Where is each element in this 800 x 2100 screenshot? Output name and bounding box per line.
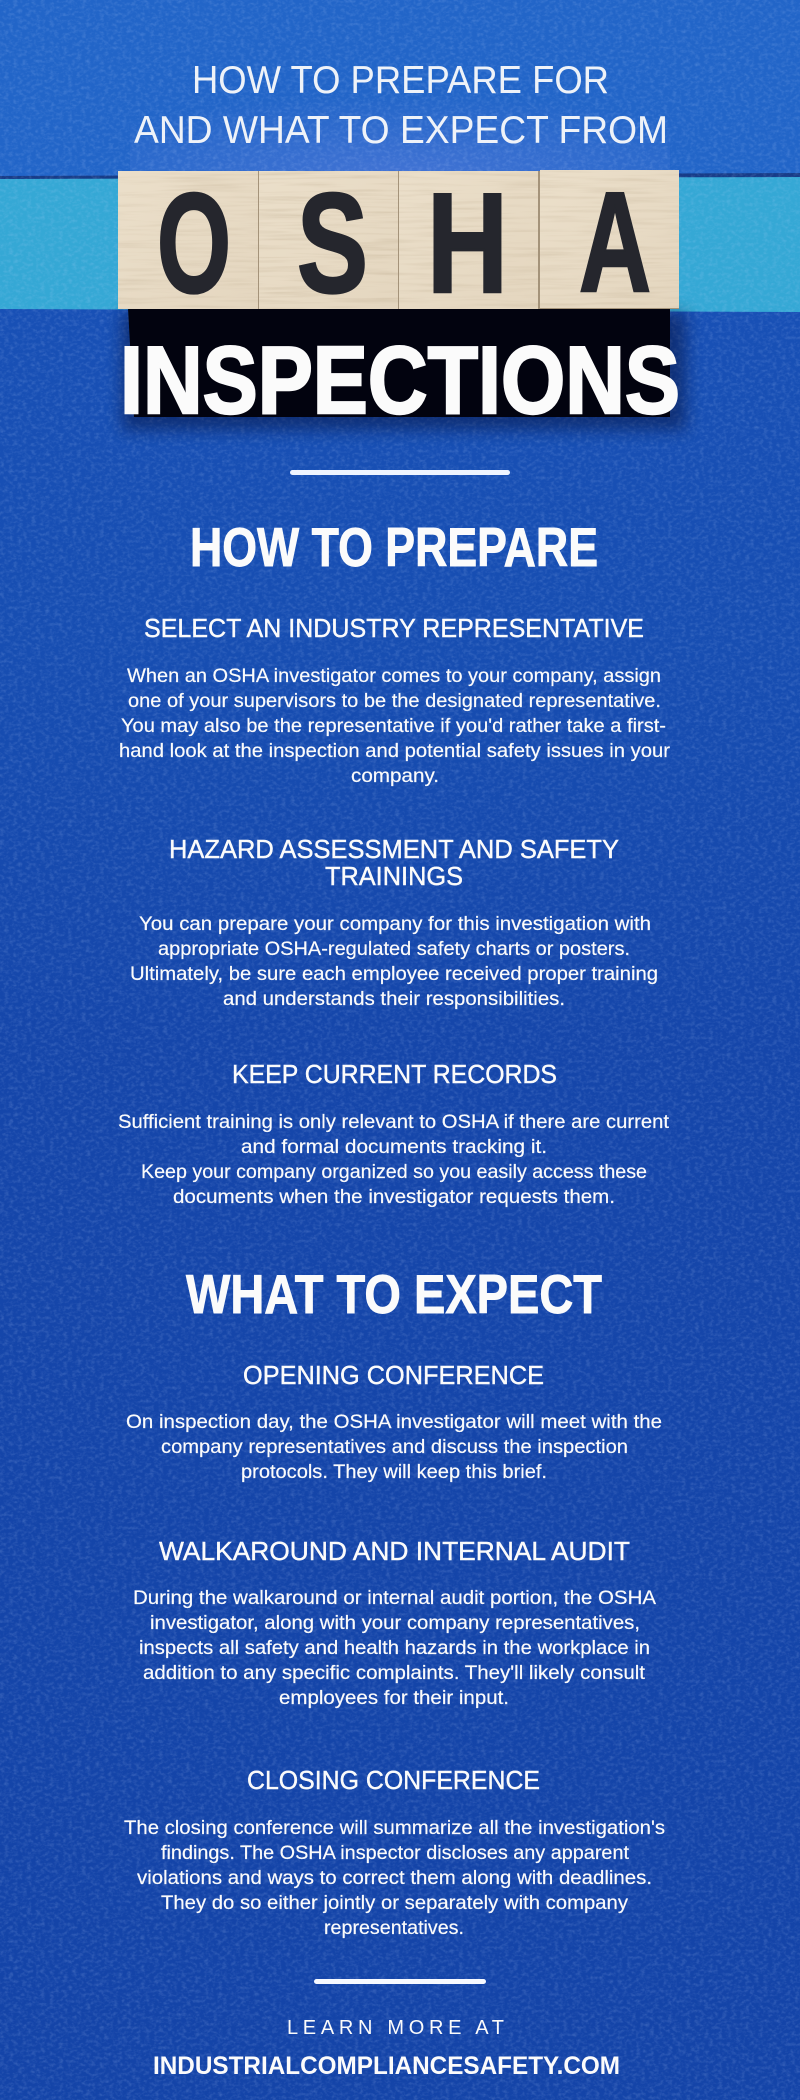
body text <box>124 1817 665 1939</box>
body text <box>130 913 658 1010</box>
subheading: KEEP CURRENT RECORDS <box>232 1059 557 1089</box>
title intro: AND WHAT TO EXPECT FROM <box>134 109 668 152</box>
main title: inspections: INSPECTIONS <box>120 327 680 434</box>
subheading <box>169 834 619 891</box>
body text: inspects all safety and health hazards in the workplace in <box>139 1637 650 1659</box>
body text: employees for their input. <box>279 1687 509 1709</box>
block shadow <box>122 308 686 430</box>
body text: Ultimately, be sure each employee received proper training <box>130 963 658 985</box>
body text: investigator, along with your company representatives, <box>150 1612 640 1634</box>
body text: company representatives and discuss the inspection <box>161 1436 628 1458</box>
block S: S <box>297 164 368 323</box>
subheading: HAZARD ASSESSMENT AND SAFETY <box>169 834 619 864</box>
body text: and formal documents tracking it. <box>241 1136 547 1158</box>
title intro <box>134 59 668 152</box>
wooden OSHA blocks <box>118 163 679 323</box>
section: what to expect <box>124 1263 665 1939</box>
body text: and understands their responsibilities. <box>223 988 565 1010</box>
body text: appropriate OSHA-regulated safety charts or posters. <box>158 938 630 960</box>
body text: Sufficient training is only relevant to OSHA if there are current <box>118 1111 670 1133</box>
subheading: OPENING CONFERENCE <box>243 1360 544 1390</box>
panel: hazard assessment <box>130 834 658 1010</box>
body text: violations and ways to correct them along with deadlines. <box>137 1867 652 1889</box>
body text: one of your supervisors to be the designated representative. <box>128 690 661 712</box>
block S <box>259 164 398 323</box>
body text: During the walkaround or internal audit portion, the OSHA <box>133 1587 656 1609</box>
body text: You may also be the representative if you'd rather take a first- <box>121 715 666 737</box>
body text: On inspection day, the OSHA investigator will meet with the <box>126 1411 662 1433</box>
body text: company. <box>351 765 439 787</box>
panel: keep current records <box>118 1059 670 1208</box>
body text: Keep your company organized so you easily access these <box>141 1161 647 1183</box>
body text: protocols. They will keep this brief. <box>241 1461 547 1483</box>
body text: When an OSHA investigator comes to your company, assign <box>127 665 661 687</box>
heading: what to expect: WHAT TO EXPECT <box>186 1263 602 1325</box>
subheading: SELECT AN INDUSTRY REPRESENTATIVE <box>144 613 644 643</box>
divider bottom <box>314 1979 486 1984</box>
title intro: HOW TO PREPARE FOR <box>192 59 609 102</box>
footer label: LEARN MORE AT <box>287 2017 504 2039</box>
body text: The closing conference will summarize all the investigation's <box>124 1817 665 1839</box>
divider top <box>290 470 510 475</box>
body text <box>119 665 671 787</box>
subheading: WALKAROUND AND INTERNAL AUDIT <box>159 1536 630 1566</box>
body text: hand look at the inspection and potential safety issues in your <box>119 740 671 762</box>
block O: O <box>157 164 231 323</box>
heading: how to prepare: HOW TO PREPARE <box>190 516 598 578</box>
body text: representatives. <box>324 1917 464 1939</box>
body text: addition to any specific complaints. They'll likely consult <box>143 1662 646 1684</box>
panel: walkaround and internal audit <box>133 1536 656 1709</box>
block A: A <box>579 163 651 322</box>
body text <box>118 1111 670 1208</box>
body text <box>133 1587 656 1709</box>
footer website: INDUSTRIALCOMPLIANCESAFETY.COM <box>153 2052 620 2080</box>
body text: They do so either jointly or separately with company <box>161 1892 628 1914</box>
panel: closing conference <box>124 1765 665 1939</box>
block H: H <box>427 164 508 323</box>
body text <box>126 1411 662 1483</box>
panel: select an industry representative <box>119 613 671 787</box>
subheading: CLOSING CONFERENCE <box>247 1765 540 1795</box>
panel: opening conference <box>126 1360 662 1483</box>
block O <box>118 164 258 323</box>
body text: findings. The OSHA inspector discloses any apparent <box>161 1842 630 1864</box>
section: how to prepare <box>118 516 671 1208</box>
body text: You can prepare your company for this investigation with <box>139 913 651 935</box>
body text: documents when the investigator requests them. <box>173 1186 615 1208</box>
subheading: TRAININGS <box>325 861 463 891</box>
